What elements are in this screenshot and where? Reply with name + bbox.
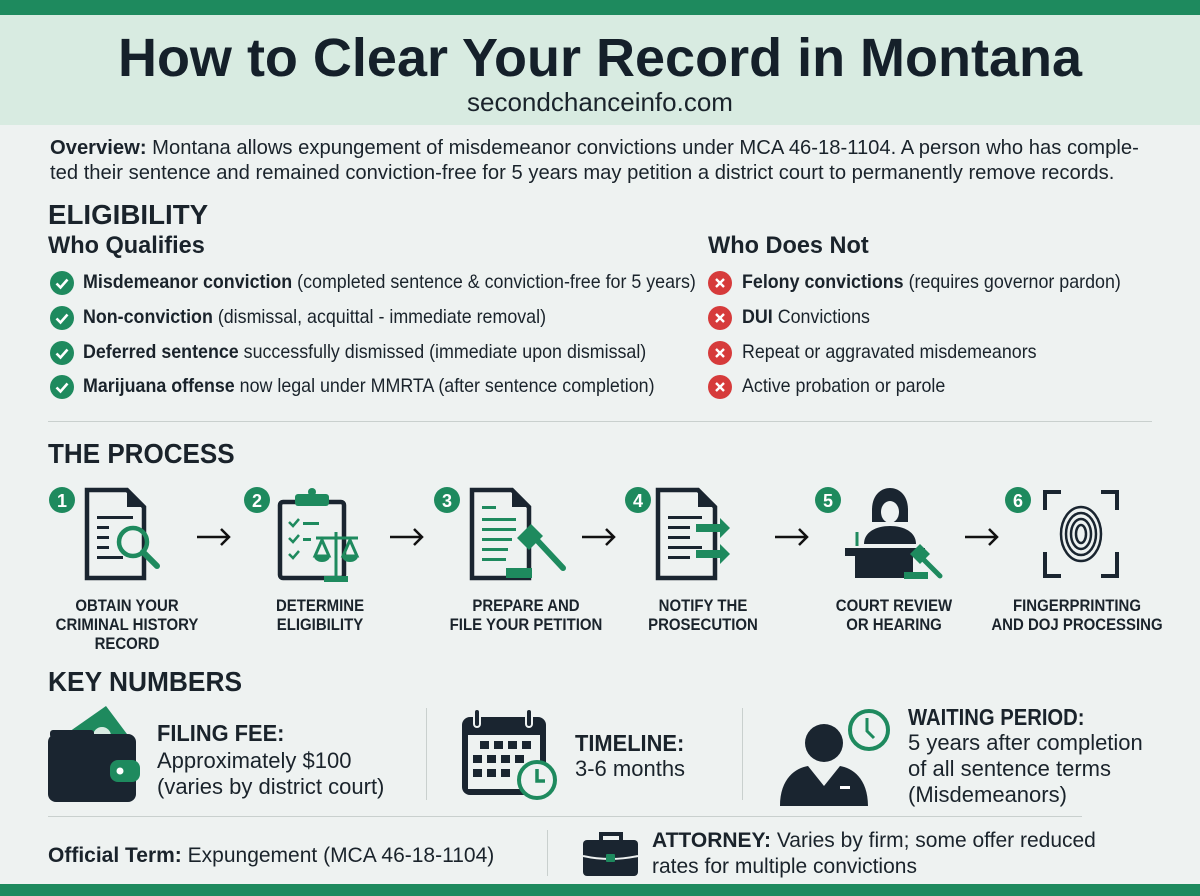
attorney	[583, 829, 1096, 878]
item 1: Misdemeanor conviction (completed sentence & conviction-free for 5 years)	[83, 271, 696, 293]
title: How to Clear Your Record in Montana	[118, 28, 1082, 88]
key: filing fee: Approximately $100	[157, 748, 351, 773]
label 6	[991, 596, 1163, 634]
heading: eligibility: ELIGIBILITY	[48, 199, 208, 230]
header band	[0, 15, 1200, 125]
panel: who qualifies	[48, 232, 696, 399]
heading: key numbers: KEY NUMBERS	[48, 666, 242, 697]
label 4	[648, 596, 758, 634]
bottom bar	[0, 884, 1200, 896]
label 1	[56, 596, 198, 653]
top bar	[0, 0, 1200, 15]
label 6: AND DOJ PROCESSING	[991, 615, 1163, 634]
step 4 icon: 4	[633, 491, 643, 511]
icon: calendar	[462, 710, 557, 800]
arrow 5	[965, 529, 997, 545]
item 2: DUI Convictions	[742, 306, 870, 328]
label 3: PREPARE AND	[472, 596, 580, 615]
label 6: FINGERPRINTING	[1013, 596, 1141, 615]
label 1: CRIMINAL HISTORY	[56, 615, 198, 634]
icon: person with clock	[780, 709, 890, 806]
icon: briefcase	[583, 832, 638, 876]
subheading: Who Qualifies	[48, 232, 205, 259]
arrow 1	[197, 529, 229, 545]
subtitle: secondchanceinfo.com	[467, 87, 733, 117]
step 5 icon: 5	[823, 491, 833, 511]
arrow 2	[390, 529, 422, 545]
step 1 icon: 1	[57, 491, 67, 511]
label 1: OBTAIN YOUR	[75, 596, 179, 615]
key: timeline: 3-6 months	[575, 756, 685, 781]
key: filing fee: (varies by district court)	[157, 774, 384, 799]
key: timeline	[462, 710, 685, 800]
overview: Overview: Montana allows expungement of misdemeanor convictions under MCA 46-18-1104. A person who has comple-	[50, 137, 1139, 159]
key: waiting period: (Misdemeanors)	[908, 782, 1067, 807]
label 3: FILE YOUR PETITION	[450, 615, 602, 634]
label 2: DETERMINE	[276, 596, 364, 615]
item 4: Active probation or parole	[742, 375, 945, 397]
step 2 icon	[244, 487, 358, 582]
step 6 icon	[1005, 487, 1117, 576]
step 6 icon: 6	[1013, 491, 1023, 511]
process steps	[49, 487, 1163, 653]
label 5: COURT REVIEW	[836, 596, 952, 615]
official term: Official Term: Expungement (MCA 46-18-1104)	[48, 844, 494, 867]
item 3: Repeat or aggravated misdemeanors	[742, 341, 1037, 363]
key: timeline: TIMELINE:	[575, 730, 684, 756]
item 1: Felony convictions (requires governor pardon)	[742, 271, 1121, 293]
label 5: OR HEARING	[846, 615, 942, 634]
label 4: NOTIFY THE	[659, 596, 747, 615]
label 5	[836, 596, 952, 634]
item 2: Non-conviction (dismissal, acquittal - immediate removal)	[83, 306, 546, 328]
key: waiting period: WAITING PERIOD:	[908, 704, 1085, 730]
subheading: Who Does Not	[708, 232, 869, 259]
step 4 icon	[625, 487, 730, 578]
arrow 4	[775, 529, 807, 545]
attorney: rates for multiple convictions	[652, 855, 917, 878]
step 3 icon	[434, 487, 563, 578]
key: waiting period	[780, 704, 1143, 807]
step 5 icon	[815, 487, 940, 579]
item 4: Marijuana offense now legal under MMRTA (after sentence completion)	[83, 375, 655, 397]
arrow 3	[582, 529, 614, 545]
overview: ted their sentence and remained conviction-free for 5 years may petition a district court to permanently remove records.	[50, 162, 1114, 184]
label 2: ELIGIBILITY	[277, 615, 363, 634]
item 3: Deferred sentence successfully dismissed (immediate upon dismissal)	[83, 341, 646, 363]
icon: wallet	[48, 706, 140, 802]
key: filing fee	[48, 706, 384, 802]
key: waiting period: 5 years after completion	[908, 730, 1143, 755]
label 3	[450, 596, 602, 634]
step 3 icon: 3	[442, 491, 452, 511]
panel: who does not	[708, 232, 1121, 399]
attorney: ATTORNEY: Varies by firm; some offer reduced	[652, 829, 1096, 852]
key: waiting period: of all sentence terms	[908, 756, 1111, 781]
heading: the process: THE PROCESS	[48, 438, 235, 469]
step 2 icon: 2	[252, 491, 262, 511]
key: filing fee: FILING FEE:	[157, 720, 284, 746]
label 4: PROSECUTION	[648, 615, 758, 634]
label 1: RECORD	[95, 634, 159, 653]
step 1 icon	[49, 487, 157, 578]
label 2	[276, 596, 364, 634]
overview	[50, 137, 1139, 184]
